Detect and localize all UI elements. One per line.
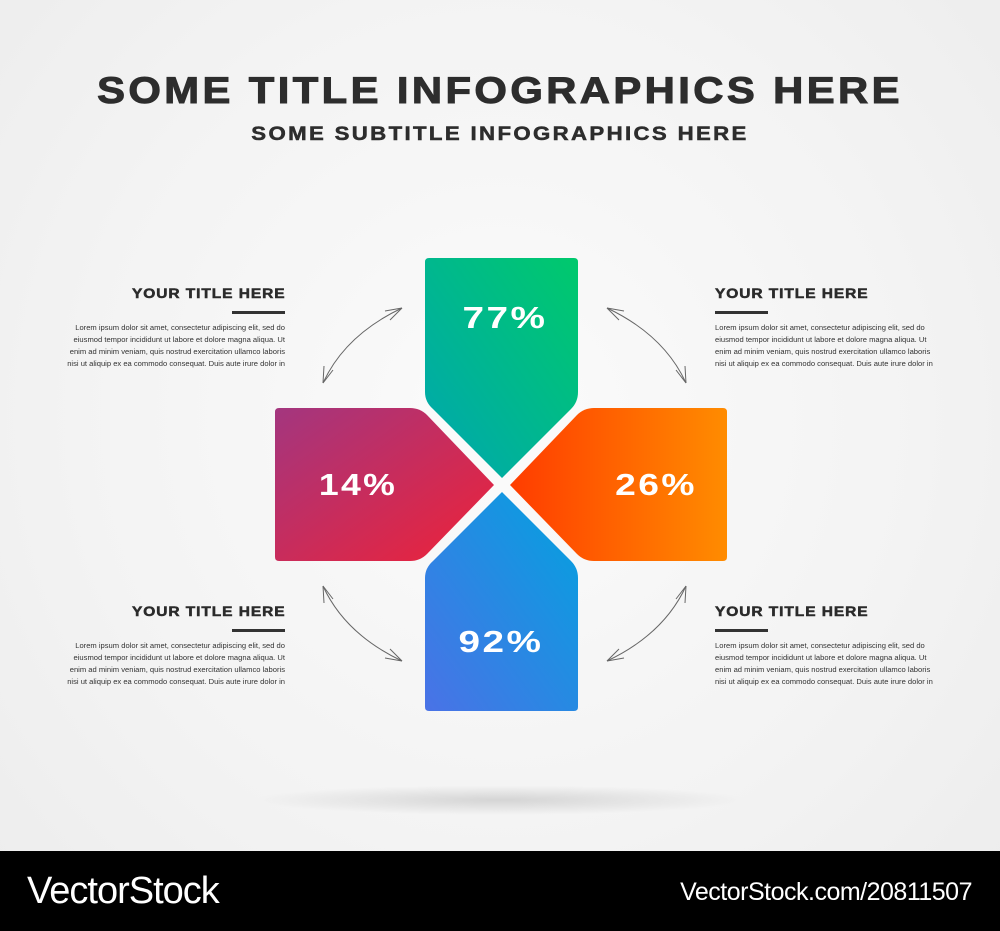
text block: bottom-right: enim ad minim veniam, quis nostrud exercitation ullamco laboris bbox=[715, 665, 930, 674]
footer bar bbox=[0, 851, 1000, 931]
text block: top-right: enim ad minim veniam, quis nostrud exercitation ullamco laboris bbox=[715, 347, 930, 356]
footer id: VectorStock.com/20811507 bbox=[680, 878, 972, 906]
petal: right 26%: 26% bbox=[615, 468, 697, 502]
text block: top-right bbox=[714, 286, 933, 368]
petal: bottom 92%: 92% bbox=[458, 625, 544, 659]
petal: bottom 92% bbox=[425, 492, 578, 711]
text block: bottom-left: enim ad minim veniam, quis nostrud exercitation ullamco laboris bbox=[70, 665, 285, 674]
text block: bottom-left: YOUR TITLE HERE bbox=[132, 604, 286, 619]
petal: left 14%: 14% bbox=[319, 468, 397, 502]
text block: bottom-right: Lorem ipsum dolor sit amet, consectetur adipiscing elit, sed do bbox=[715, 641, 925, 650]
subtitle: SOME SUBTITLE INFOGRAPHICS HERE bbox=[251, 124, 749, 145]
text block: bottom-right: eiusmod tempor incididunt ut labore et dolore magna aliqua. Ut bbox=[715, 653, 926, 662]
text block: bottom-left: nisi ut aliquip ex ea commodo consequat. Duis aute irure dolor in bbox=[67, 677, 285, 686]
petal: right 26% bbox=[510, 408, 727, 561]
text block: bottom-right: YOUR TITLE HERE bbox=[715, 604, 869, 619]
footer logo: VectorStock bbox=[27, 870, 219, 912]
text block: top-right: Lorem ipsum dolor sit amet, consectetur adipiscing elit, sed do bbox=[715, 323, 925, 332]
text block: top-left: eiusmod tempor incididunt ut labore et dolore magna aliqua. Ut bbox=[74, 335, 285, 344]
text block: top-right: nisi ut aliquip ex ea commodo consequat. Duis aute irure dolor in bbox=[715, 359, 933, 368]
text block: bottom-left bbox=[67, 604, 286, 686]
text block: top-left: enim ad minim veniam, quis nostrud exercitation ullamco laboris bbox=[70, 347, 285, 356]
text block: bottom-left: Lorem ipsum dolor sit amet, consectetur adipiscing elit, sed do bbox=[75, 641, 285, 650]
text block: top-right: eiusmod tempor incididunt ut labore et dolore magna aliqua. Ut bbox=[715, 335, 926, 344]
title: SOME TITLE INFOGRAPHICS HERE bbox=[97, 70, 903, 111]
shadow bbox=[250, 785, 750, 815]
text block: bottom-right bbox=[714, 604, 933, 686]
text block: bottom-left: eiusmod tempor incididunt ut labore et dolore magna aliqua. Ut bbox=[74, 653, 285, 662]
petal: top 77%: 77% bbox=[462, 301, 548, 335]
arrows bbox=[323, 308, 686, 661]
petal: left 14% bbox=[275, 408, 494, 561]
petal: top 77% bbox=[425, 258, 578, 478]
text block: top-left: Lorem ipsum dolor sit amet, consectetur adipiscing elit, sed do bbox=[75, 323, 285, 332]
text block: bottom-right: nisi ut aliquip ex ea commodo consequat. Duis aute irure dolor in bbox=[715, 677, 933, 686]
text block: top-left bbox=[67, 286, 286, 368]
text block: top-right: YOUR TITLE HERE bbox=[715, 286, 869, 301]
text block: top-left: nisi ut aliquip ex ea commodo consequat. Duis aute irure dolor in bbox=[67, 359, 285, 368]
text block: top-left: YOUR TITLE HERE bbox=[132, 286, 286, 301]
